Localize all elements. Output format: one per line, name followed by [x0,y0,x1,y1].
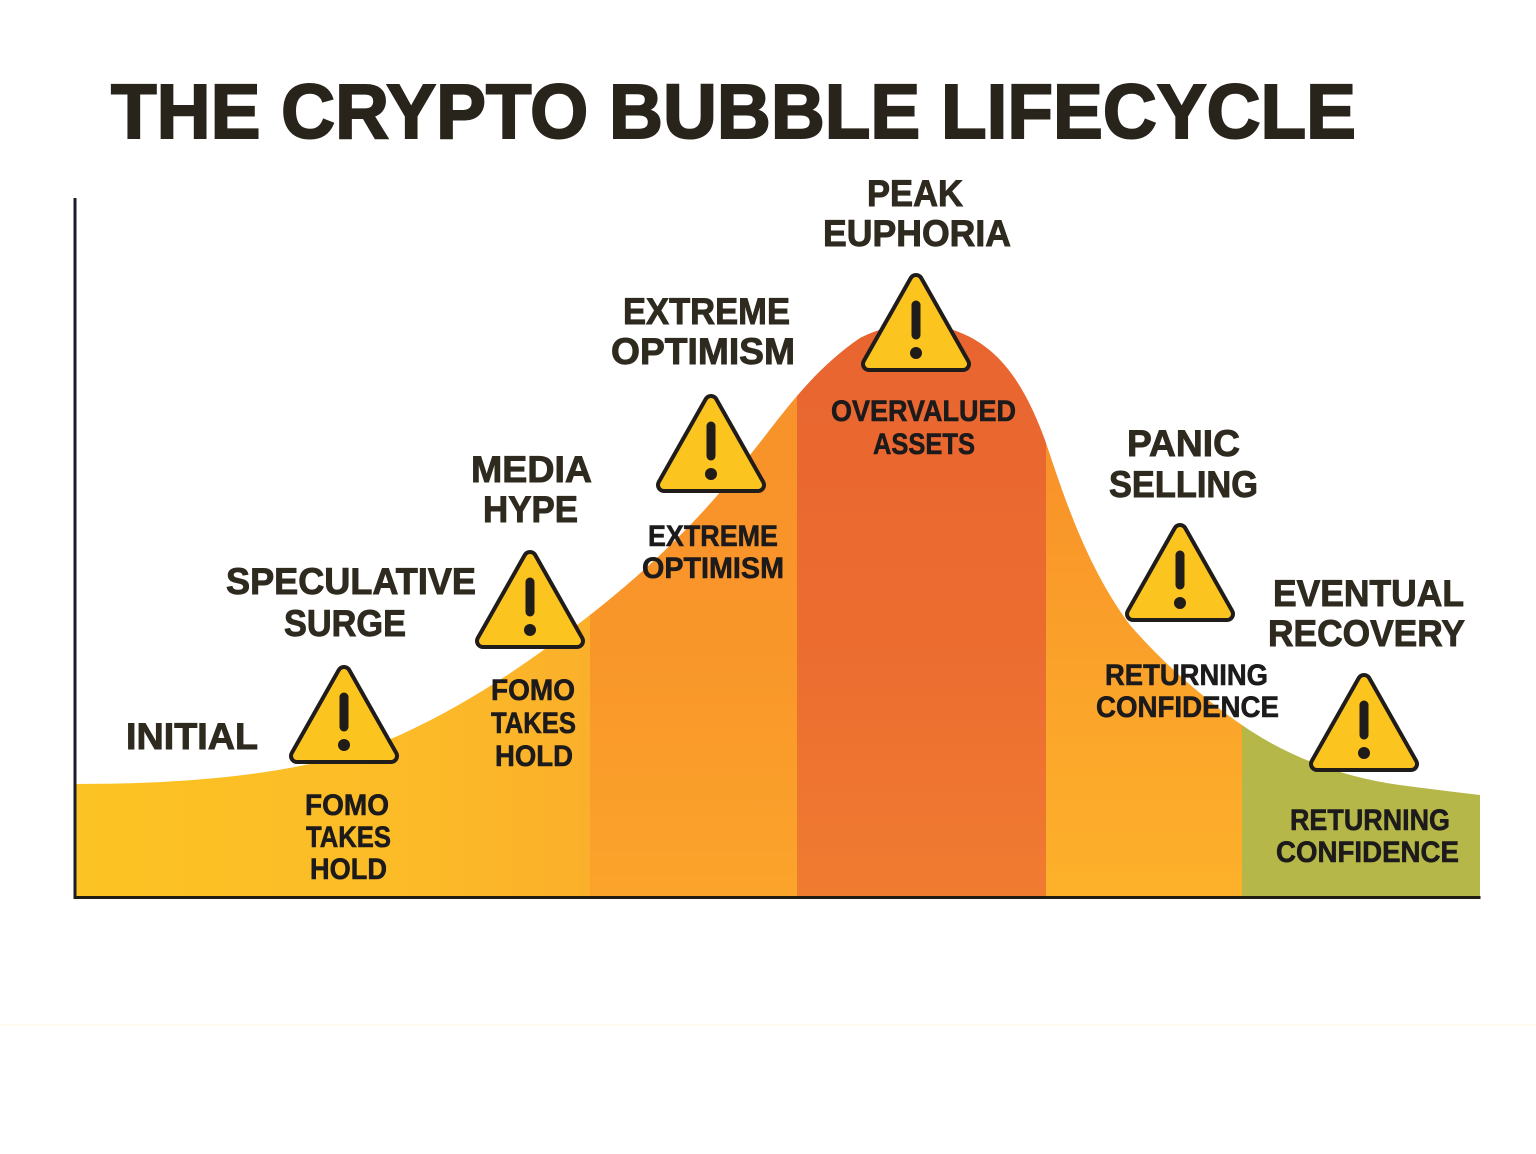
stage: eventual recovery [1268,573,1465,869]
sub label [1096,659,1279,724]
stage: panic selling [1096,423,1279,724]
axes [74,198,1480,899]
heading line 2: OPTIMISM [611,331,795,372]
x axis [74,896,1480,899]
band: peak euphoria [797,300,1046,900]
faint page divider band [0,1024,1536,1026]
sub label: OVERVALUED [831,395,1016,428]
heading line 2: SURGE [284,603,406,644]
sub label [491,674,576,773]
band: eventual recovery [1242,725,1480,896]
title: THE CRYPTO BUBBLE LIFECYCLE [111,69,1356,155]
area chart: bubble lifecycle curve [76,300,1482,900]
warning icon [297,673,391,756]
sub label: EXTREME [648,520,778,553]
sub label: OPTIMISM [642,552,784,585]
heading line 2: SELLING [1109,464,1258,505]
heading line 1: EVENTUAL [1273,573,1464,614]
warning icon [483,558,577,641]
warning icon [664,402,758,485]
heading line 2: HYPE [483,489,578,530]
y axis [74,198,76,899]
sub label [831,395,1016,461]
band: panic selling [1046,420,1242,900]
stage: media hype [471,449,592,773]
sub label: CONFIDENCE [1276,836,1459,869]
warning icon [1133,531,1227,614]
stage: peak euphoria [823,173,1016,461]
heading line 1: PEAK [867,173,963,214]
sub label: TAKES [306,821,391,854]
stage: extreme optimism [611,291,795,585]
sub label [642,520,784,585]
heading line 1: PANIC [1127,423,1240,464]
sub label: HOLD [310,853,387,886]
heading line 1: SPECULATIVE [226,561,476,602]
warning icon [869,281,963,364]
sub label: ASSETS [873,428,975,461]
heading line 2: EUPHORIA [823,213,1011,254]
sub label [1276,804,1459,869]
heading: INITIAL [126,716,258,757]
sub label: CONFIDENCE [1096,691,1279,724]
heading line 1: MEDIA [471,449,592,490]
sub label: RETURNING [1105,659,1268,692]
stage: speculative surge [226,561,476,886]
band: extreme optimism [590,390,797,900]
sub label: HOLD [495,740,573,773]
sub label: RETURNING [1290,804,1450,837]
sub label: FOMO [305,789,389,822]
heading line 2: RECOVERY [1268,613,1465,654]
sub label: FOMO [491,674,575,707]
band: early stages [76,615,590,896]
warning icon [1317,681,1411,764]
sub label [305,789,391,886]
heading line 1: EXTREME [623,291,790,332]
sub label: TAKES [491,707,576,740]
